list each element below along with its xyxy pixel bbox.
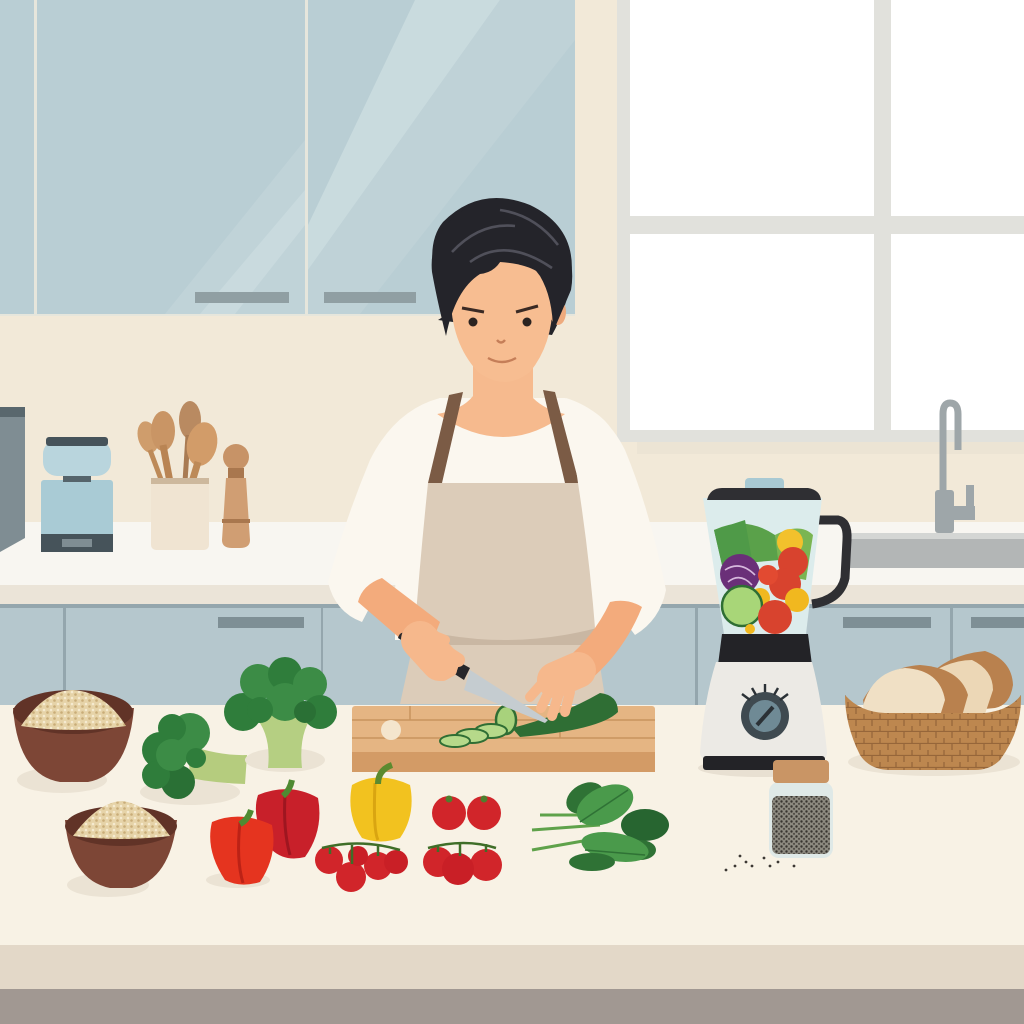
icon: pepper mill	[222, 444, 250, 548]
icon: blender	[698, 478, 847, 777]
torso	[395, 398, 620, 640]
panel: lower cabinets	[0, 604, 1024, 706]
left sleeve	[328, 398, 440, 622]
icon: two tomatoes	[432, 796, 501, 830]
eyes and brows	[462, 306, 538, 362]
icon: lower grain bowl	[65, 801, 177, 897]
icon: cucumber hand	[530, 670, 578, 716]
icon: sink and faucet	[845, 403, 1024, 568]
hair back	[432, 198, 572, 335]
icon: tomato vine	[423, 842, 502, 885]
icon: wooden utensils in pot	[134, 401, 221, 550]
ear	[550, 299, 566, 325]
scattered chia seeds	[725, 855, 795, 871]
hair front	[432, 200, 572, 336]
neck and chest	[437, 365, 565, 437]
icon: bread basket	[845, 651, 1021, 776]
blender lid	[707, 478, 821, 500]
panel: back counter	[0, 522, 1024, 604]
blender collar	[718, 634, 812, 665]
apron	[400, 390, 606, 704]
right sleeve	[566, 398, 666, 635]
icon: cherry tomatoes on vine	[315, 843, 408, 892]
icon: small food processor	[41, 437, 113, 552]
panel: front counter	[0, 705, 1024, 1024]
face	[451, 262, 553, 382]
person	[328, 198, 666, 704]
icon: knife hand	[415, 628, 458, 675]
icon: knife	[398, 633, 548, 723]
icon: cucumber and slices	[440, 693, 618, 747]
blender base	[700, 662, 827, 760]
blender jar	[703, 498, 822, 634]
icon: broccoli on its side	[140, 713, 247, 805]
blender dial	[741, 684, 789, 740]
left forearm	[358, 578, 440, 660]
panel: cutting board	[352, 706, 655, 772]
blender handle	[812, 520, 847, 604]
panel: window	[617, 0, 1024, 454]
icon: chia seed jar	[769, 760, 833, 858]
icon: red pepper back	[256, 780, 319, 858]
icon: upper grain bowl	[13, 690, 134, 793]
hair highlights	[452, 210, 558, 268]
icon: coffee machine edge	[0, 407, 25, 552]
panel: upper cabinets	[0, 0, 575, 316]
icon: yellow bell pepper	[350, 765, 412, 842]
blender contents	[714, 520, 813, 634]
icon: spinach bunch	[532, 776, 669, 871]
right forearm	[565, 601, 642, 680]
icon: red pepper front	[206, 810, 274, 888]
icon: standing broccoli	[224, 657, 337, 772]
